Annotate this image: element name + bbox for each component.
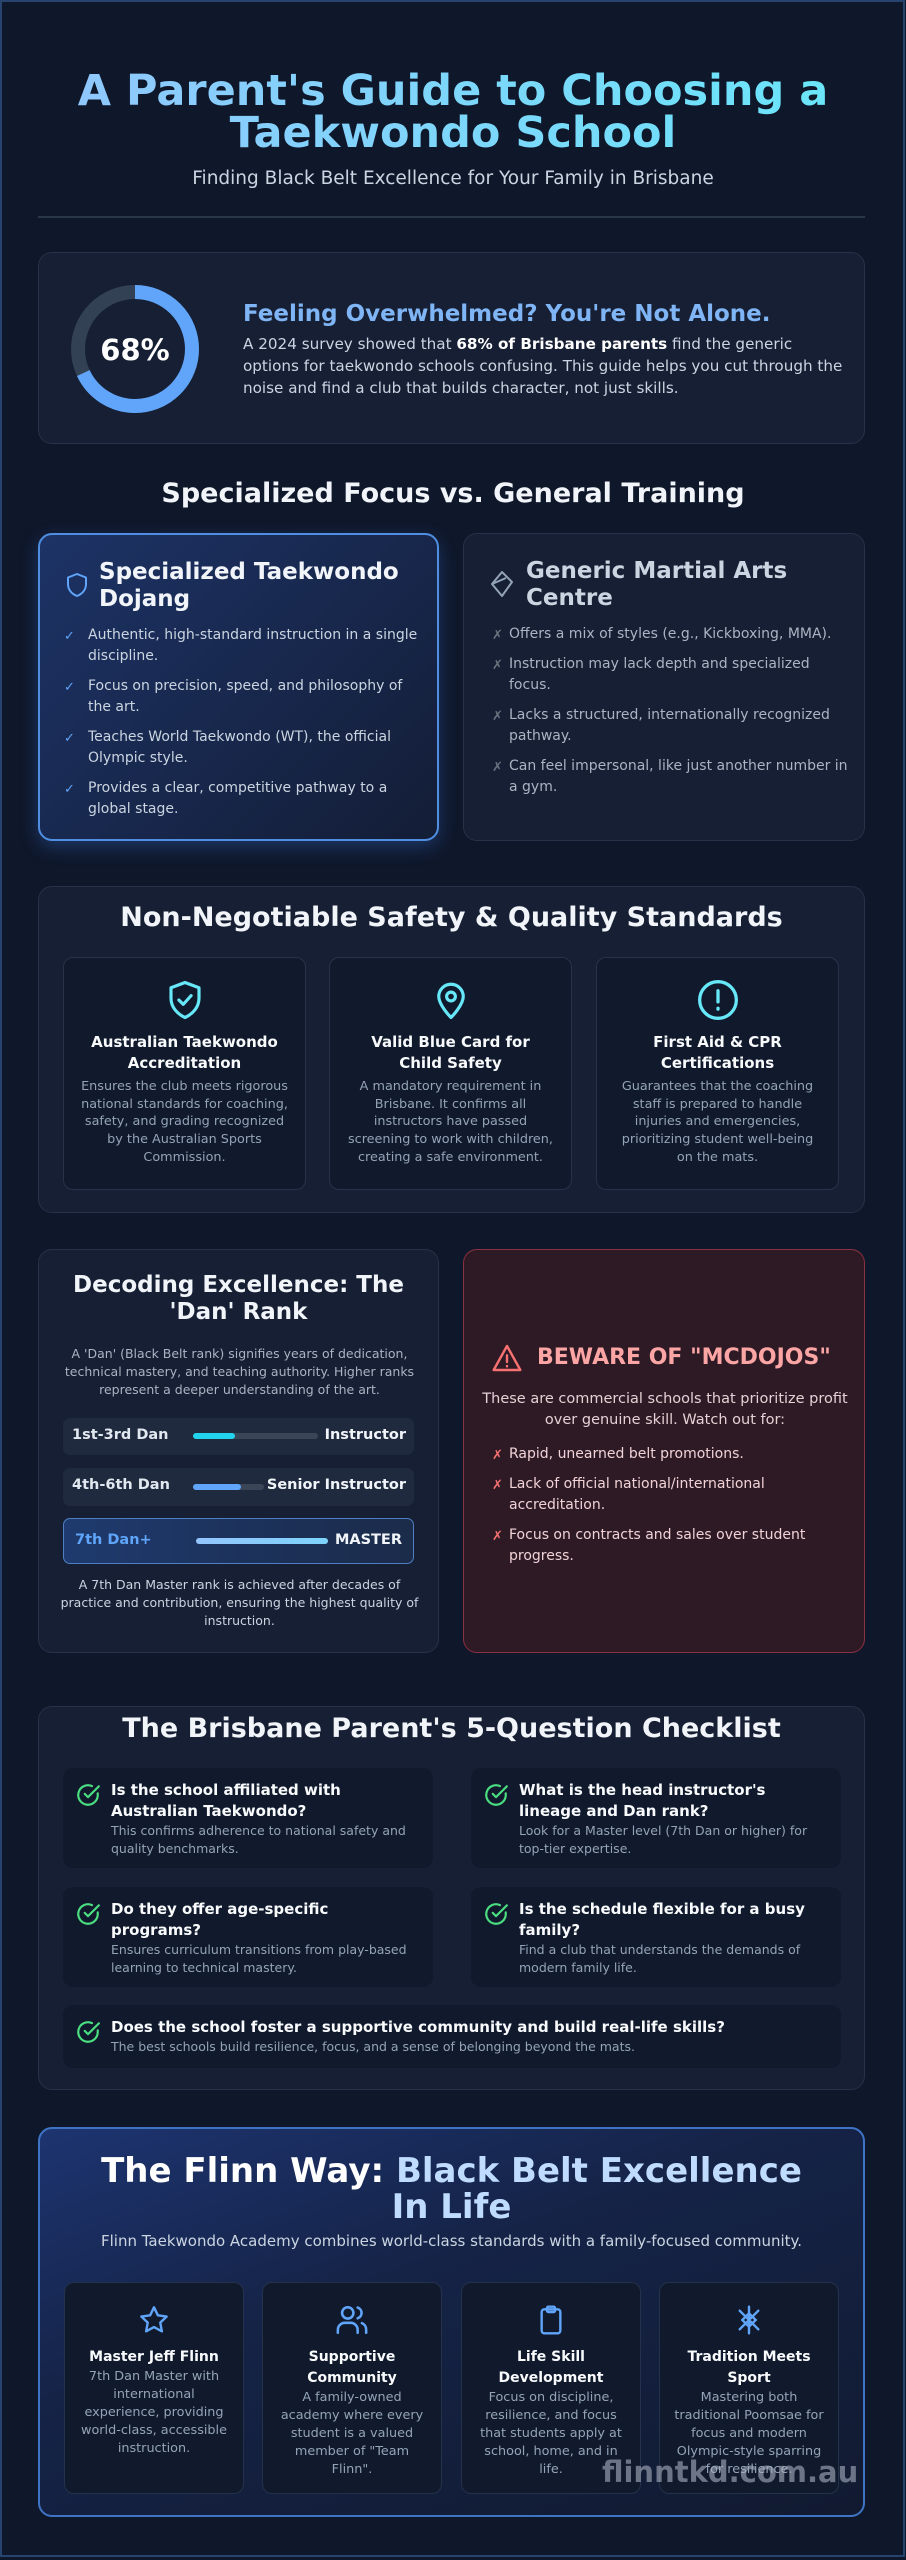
- icon: alert circle: [698, 980, 738, 1020]
- list: drawbacks: Offers a mix of styles (e.g., Kickboxing, MMA).: [509, 626, 831, 642]
- panel: generic centre: [463, 533, 865, 841]
- item: schedule: [471, 1887, 841, 1987]
- list: warning signs: ✗: [492, 1478, 503, 1493]
- list: benefits: [64, 627, 417, 817]
- icon: tradition emblem: [738, 2306, 760, 2334]
- card: accreditation: Australian Taekwondo Accreditation: [91, 1033, 278, 1072]
- panel: safety standards: [38, 886, 865, 1213]
- item: age programs: Do they offer age-specific programs?: [111, 1900, 328, 1939]
- heading: [99, 559, 399, 612]
- row: 4th-6th dan: [63, 1468, 414, 1506]
- heading: [526, 558, 787, 611]
- card: supportive community: A family-owned academy where every student is a valued member of "Team Flinn".: [281, 2390, 423, 2477]
- card: master jeff flinn: [64, 2282, 244, 2494]
- heading: Non-Negotiable Safety & Quality Standards: [120, 902, 783, 933]
- list: warning signs: [492, 1446, 806, 1564]
- panel: specialized dojang: [38, 533, 439, 841]
- icon: diamond: [491, 571, 513, 597]
- list: drawbacks: ✗: [492, 760, 503, 775]
- item: community: The best schools build resilience, focus, and a sense of belonging beyond the mats.: [111, 2039, 635, 2054]
- list: warning signs: ✗: [492, 1448, 503, 1463]
- heading: 'Dan' Rank: [170, 1299, 307, 1325]
- row: 7th dan master: MASTER: [335, 1532, 402, 1548]
- text block: footer: A 7th Dan Master rank is achieved after decades of practice and contribution, ensuring the highest quality of instruction.: [61, 1577, 418, 1628]
- row: 1st-3rd dan: 1st-3rd Dan: [72, 1427, 168, 1443]
- row: 1st-3rd dan: [63, 1418, 414, 1455]
- row: 4th-6th dan: 4th-6th Dan: [72, 1477, 170, 1493]
- list: benefits: ✓: [64, 782, 75, 797]
- row: 7th dan master: [63, 1518, 414, 1564]
- row: 7th dan master: 7th Dan+: [75, 1532, 152, 1548]
- list: benefits: ✓: [64, 680, 75, 695]
- title: [0, 70, 906, 154]
- item: affiliation: This confirms adherence to national safety and quality benchmarks.: [111, 1823, 406, 1856]
- card: blue card: A mandatory requirement in Brisbane. It confirms all instructors have passed screening to work with children, creating a safe environment.: [348, 1079, 553, 1165]
- title: A Parent's Guide to Choosing a: [78, 66, 828, 116]
- list: benefits: ✓: [64, 731, 75, 746]
- icon: clipboard: [540, 2306, 562, 2334]
- row: 1st-3rd dan: Instructor: [325, 1427, 406, 1443]
- heading: specialized vs general: Specialized Focus vs. General Training: [161, 478, 745, 509]
- icon: shield check: [169, 980, 201, 1020]
- card: life skill: Focus on discipline, resilience, and focus that students apply at school, home, and in life.: [480, 2390, 622, 2477]
- text block: survey: A 2024 survey showed that 68% of Brisbane parents find the generic options for taekwondo schools confusing. This guide helps you cut through the noise and find a club that builds character, not just skills.: [243, 335, 842, 397]
- card: tradition meets sport: Mastering both traditional Poomsae for focus and modern Olympic-style sparring for resilience.: [674, 2390, 824, 2477]
- list: drawbacks: ✗: [492, 628, 503, 643]
- icon: star: [140, 2306, 168, 2333]
- heading: The Brisbane Parent's 5-Question Checklist: [122, 1713, 781, 1744]
- card: tradition meets sport: Tradition Meets Sport: [687, 2349, 811, 2386]
- watermark: flinntkd.com.au: [602, 2455, 858, 2489]
- panel: beware mcdojos: [463, 1249, 865, 1653]
- text block: intro: A 'Dan' (Black Belt rank) signifies years of dedication, technical mastery, and teaching authority. Higher ranks represent a deeper understanding of the art.: [65, 1346, 414, 1397]
- list: benefits: Authentic, high-standard instruction in a single discipline.: [88, 627, 417, 664]
- heading: [101, 2151, 802, 2227]
- item: age programs: Ensures curriculum transitions from play-based learning to technical mastery.: [111, 1942, 407, 1975]
- list: drawbacks: [492, 626, 848, 795]
- item: lineage: [471, 1768, 841, 1868]
- chart: donut 68%: 68%: [100, 333, 170, 367]
- icon: map pin: [437, 982, 465, 1020]
- row: 4th-6th dan: Senior Instructor: [267, 1477, 406, 1493]
- heading: Dojang: [99, 586, 190, 612]
- card: first aid: Guarantees that the coaching staff is prepared to handle injuries and emergencies, prioritizing student well-being on the mats.: [622, 1079, 813, 1165]
- card: first aid: First Aid & CPR Certifications: [653, 1033, 782, 1072]
- panel: checklist: [38, 1706, 865, 2090]
- heading: [73, 1272, 404, 1325]
- text block: These are commercial schools that prioritize profit over genuine skill. Watch out for:: [482, 1391, 848, 1428]
- heading: Decoding Excellence: The: [73, 1272, 404, 1298]
- list: warning signs: Rapid, unearned belt promotions.: [509, 1446, 744, 1462]
- card: accreditation: Ensures the club meets rigorous national standards for coaching, safety, and grading recognized by the Australian Sports Commission.: [81, 1079, 288, 1165]
- card: life skill: Life Skill Development: [499, 2349, 603, 2386]
- card: supportive community: [262, 2282, 442, 2494]
- panel: the flinn way: [38, 2127, 865, 2517]
- list: warning signs: ✗: [492, 1529, 503, 1544]
- heading: Generic Martial Arts: [526, 558, 787, 584]
- card: master jeff flinn: 7th Dan Master with international experience, providing world-class, accessible instruction.: [81, 2369, 227, 2456]
- list: drawbacks: Lacks a structured, internationally recognized pathway.: [509, 707, 830, 744]
- heading: The Flinn Way: Black Belt Excellence: [101, 2151, 802, 2191]
- list: drawbacks: Can feel impersonal, like just another number in a gym.: [509, 758, 848, 795]
- heading with warning icon: BEWARE OF "MCDOJOS": [537, 1345, 831, 1370]
- list: benefits: Focus on precision, speed, and philosophy of the art.: [88, 678, 402, 715]
- chart: donut 68%: [71, 285, 199, 413]
- card: blue card: Valid Blue Card for Child Safety: [371, 1033, 530, 1072]
- item: affiliation: Is the school affiliated with Australian Taekwondo?: [111, 1781, 341, 1820]
- heading: overwhelmed: Feeling Overwhelmed? You're Not Alone.: [243, 301, 771, 327]
- card: accreditation: [63, 957, 306, 1190]
- item: schedule: Find a club that understands the demands of modern family life.: [519, 1942, 800, 1975]
- title: Taekwondo School: [230, 108, 676, 158]
- item: schedule: Is the schedule flexible for a busy family?: [519, 1900, 805, 1939]
- panel: dan rank: [38, 1249, 439, 1653]
- list: drawbacks: ✗: [492, 658, 503, 673]
- panel: stats: [38, 252, 865, 444]
- heading: Centre: [526, 585, 613, 611]
- list: benefits: ✓: [64, 629, 75, 644]
- icon: shield: [67, 573, 87, 597]
- card: supportive community: Supportive Community: [307, 2349, 397, 2386]
- heading: In Life: [392, 2187, 511, 2227]
- card: life skill: [461, 2282, 641, 2494]
- list: drawbacks: ✗: [492, 709, 503, 724]
- item: affiliation: [63, 1768, 433, 1868]
- item: age programs: [63, 1887, 433, 1987]
- card: master jeff flinn: Master Jeff Flinn: [89, 2349, 219, 2365]
- item: community: Does the school foster a supportive community and build real-life skills?: [111, 2018, 725, 2036]
- item: lineage: Look for a Master level (7th Dan or higher) for top-tier expertise.: [519, 1823, 807, 1856]
- card: blue card: [329, 957, 572, 1190]
- item: community: [63, 2005, 841, 2068]
- card: tradition meets sport: [659, 2282, 839, 2494]
- list: benefits: Provides a clear, competitive pathway to a global stage.: [88, 780, 387, 817]
- item: lineage: What is the head instructor's lineage and Dan rank?: [519, 1781, 766, 1820]
- list: warning signs: Focus on contracts and sales over student progress.: [509, 1527, 805, 1564]
- list: benefits: Teaches World Taekwondo (WT), the official Olympic style.: [88, 729, 391, 766]
- subtitle: Flinn Taekwondo Academy combines world-class standards with a family-focused community.: [101, 2232, 802, 2250]
- heading: Specialized Taekwondo: [99, 559, 399, 585]
- icon: users: [336, 2306, 368, 2334]
- list: warning signs: Lack of official national/international accreditation.: [509, 1476, 765, 1513]
- list: drawbacks: Instruction may lack depth and specialized focus.: [509, 656, 810, 693]
- icon: warning: [492, 1344, 522, 1372]
- subtitle: Finding Black Belt Excellence for Your Family in Brisbane: [192, 168, 714, 189]
- card: first aid: [596, 957, 839, 1190]
